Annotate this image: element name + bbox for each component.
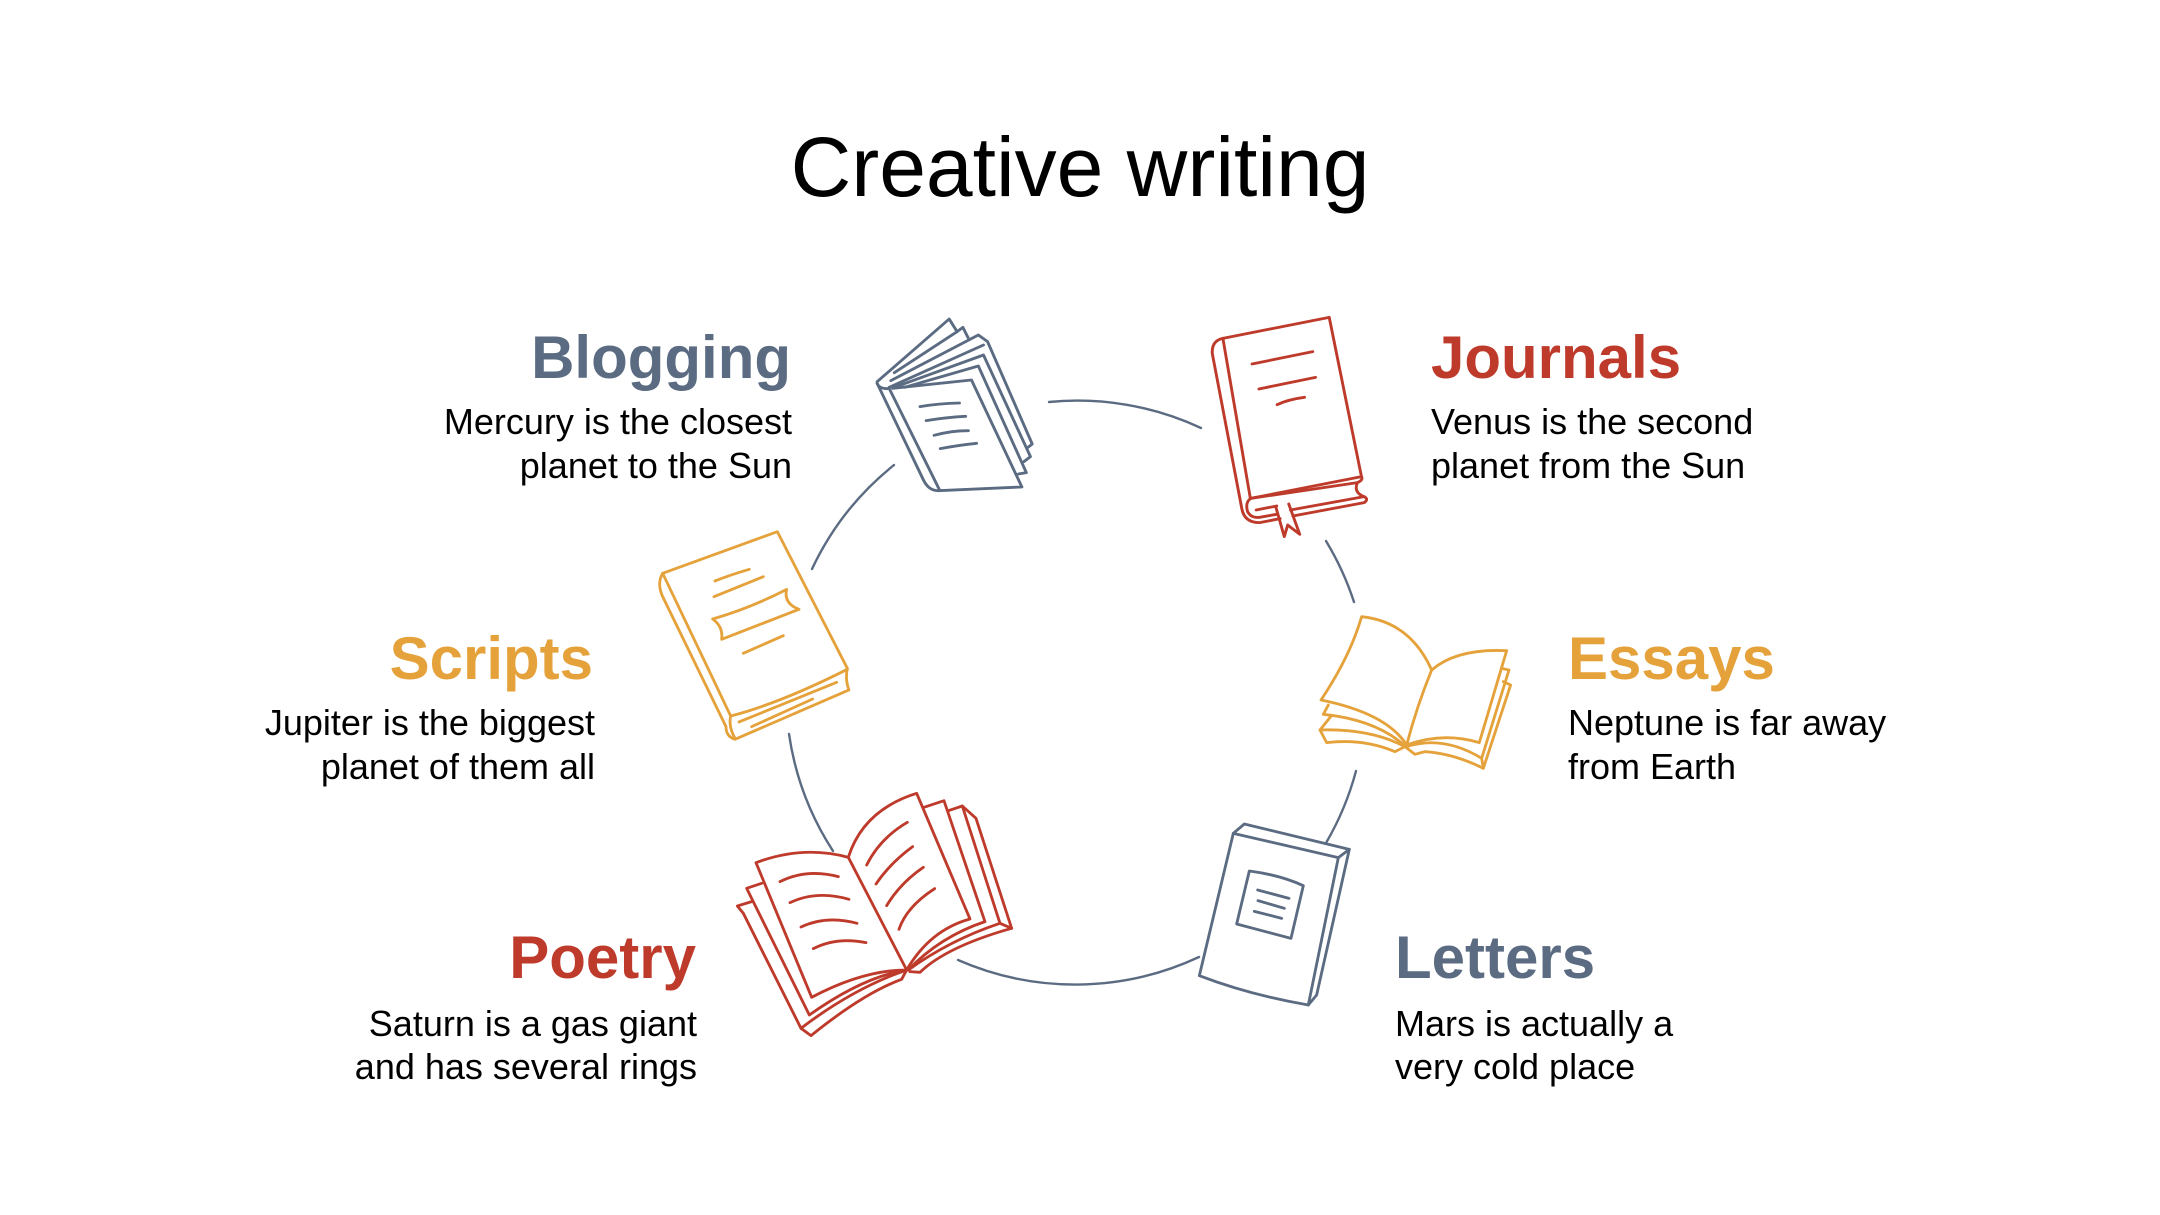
text block: Scripts <box>265 625 595 787</box>
text block: Letters <box>1395 924 1674 1087</box>
icon: Blogging book <box>877 319 1032 491</box>
text block: Essays: Neptune is far away <box>1568 702 1886 743</box>
text block: Blogging: planet to the Sun <box>520 445 792 486</box>
icon: Essays book <box>1320 617 1511 768</box>
text block: Essays: from Earth <box>1568 746 1736 787</box>
text block: Poetry: Saturn is a gas giant <box>369 1003 697 1044</box>
text block: Essays: Essays <box>1568 625 1775 692</box>
text block: Blogging: Blogging <box>531 324 791 391</box>
text block: Journals: Journals <box>1431 324 1681 391</box>
text block: Poetry: and has several rings <box>355 1046 697 1087</box>
text block: Blogging <box>444 324 792 486</box>
text block: Journals: Venus is the second <box>1431 401 1753 442</box>
text block: Journals <box>1431 324 1753 486</box>
text block: Scripts: Jupiter is the biggest <box>265 702 595 743</box>
text block: Essays <box>1568 625 1886 787</box>
text block: Poetry <box>355 924 697 1087</box>
text block: Letters: Mars is actually a <box>1395 1003 1674 1044</box>
text block: Journals: planet from the Sun <box>1431 445 1745 486</box>
text block: Letters: very cold place <box>1395 1046 1635 1087</box>
connecting circle arcs <box>789 401 1356 985</box>
title: Creative writing <box>791 120 1369 214</box>
text block: Scripts: Scripts <box>390 625 593 692</box>
icon: Scripts book <box>660 532 849 739</box>
text block: Letters: Letters <box>1395 924 1595 991</box>
icon: Letters book <box>1199 824 1349 1005</box>
text block: Poetry: Poetry <box>509 924 697 991</box>
text block: Scripts: planet of them all <box>321 746 595 787</box>
icon: Poetry book <box>737 793 1012 1036</box>
icon: Journals book <box>1212 317 1367 537</box>
text block: Blogging: Mercury is the closest <box>444 401 792 442</box>
